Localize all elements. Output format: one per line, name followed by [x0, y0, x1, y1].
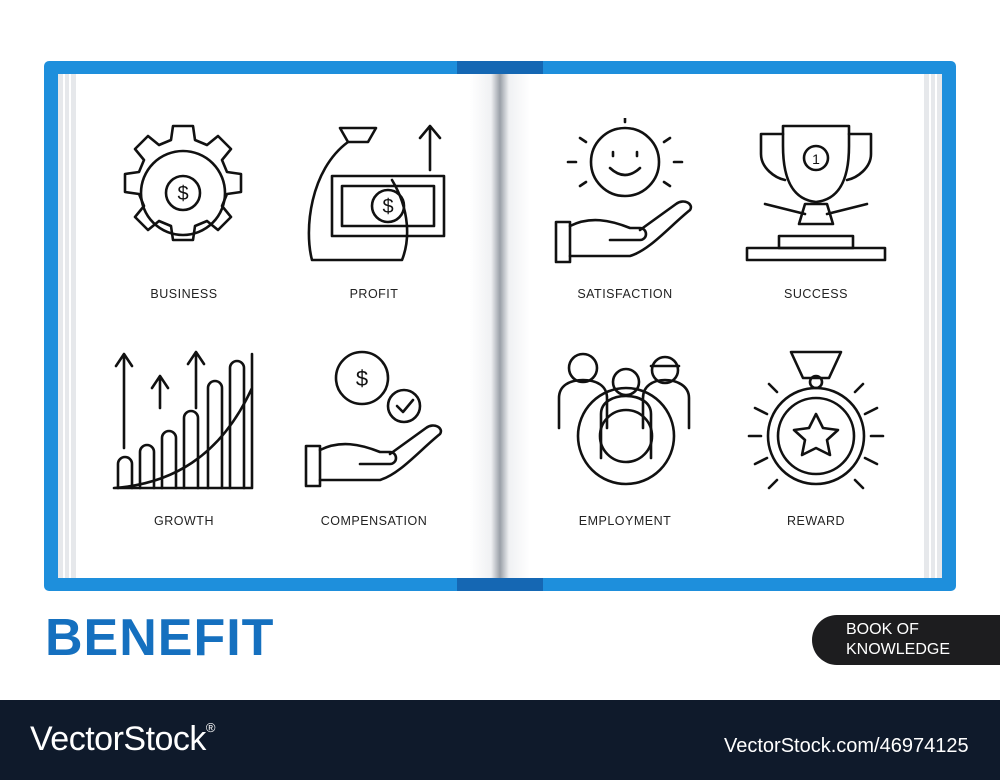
icon: success: 1 — [812, 151, 820, 167]
icon: compensation: $ — [356, 366, 368, 391]
icon: business: $ — [177, 183, 189, 205]
label: business: BUSINESS — [150, 287, 218, 301]
icon: business — [124, 124, 242, 242]
label: profit: PROFIT — [350, 287, 398, 301]
badge: KNOWLEDGE — [846, 641, 950, 658]
badge: BOOK OF — [846, 621, 919, 638]
icon: growth — [112, 350, 254, 490]
icon: employment — [558, 352, 690, 486]
icon: satisfaction — [554, 118, 692, 264]
label: satisfaction: SATISFACTION — [577, 287, 673, 301]
label: compensation: COMPENSATION — [321, 514, 427, 528]
label: reward: REWARD — [787, 514, 845, 528]
label: success: SUCCESS — [784, 287, 848, 301]
icon: success — [746, 124, 886, 262]
icon: compensation — [304, 350, 442, 488]
icon: profit: $ — [382, 196, 394, 218]
icon: reward — [748, 350, 884, 490]
title: BENEFIT — [45, 609, 274, 667]
footer logo: VectorStock® — [30, 720, 215, 758]
footer id: VectorStock.com/46974125 — [724, 735, 969, 757]
footer — [0, 700, 1000, 780]
badge — [812, 615, 1000, 665]
book — [44, 61, 956, 591]
label: growth: GROWTH — [154, 514, 214, 528]
label: employment: EMPLOYMENT — [579, 514, 671, 528]
icon: profit — [308, 124, 446, 262]
